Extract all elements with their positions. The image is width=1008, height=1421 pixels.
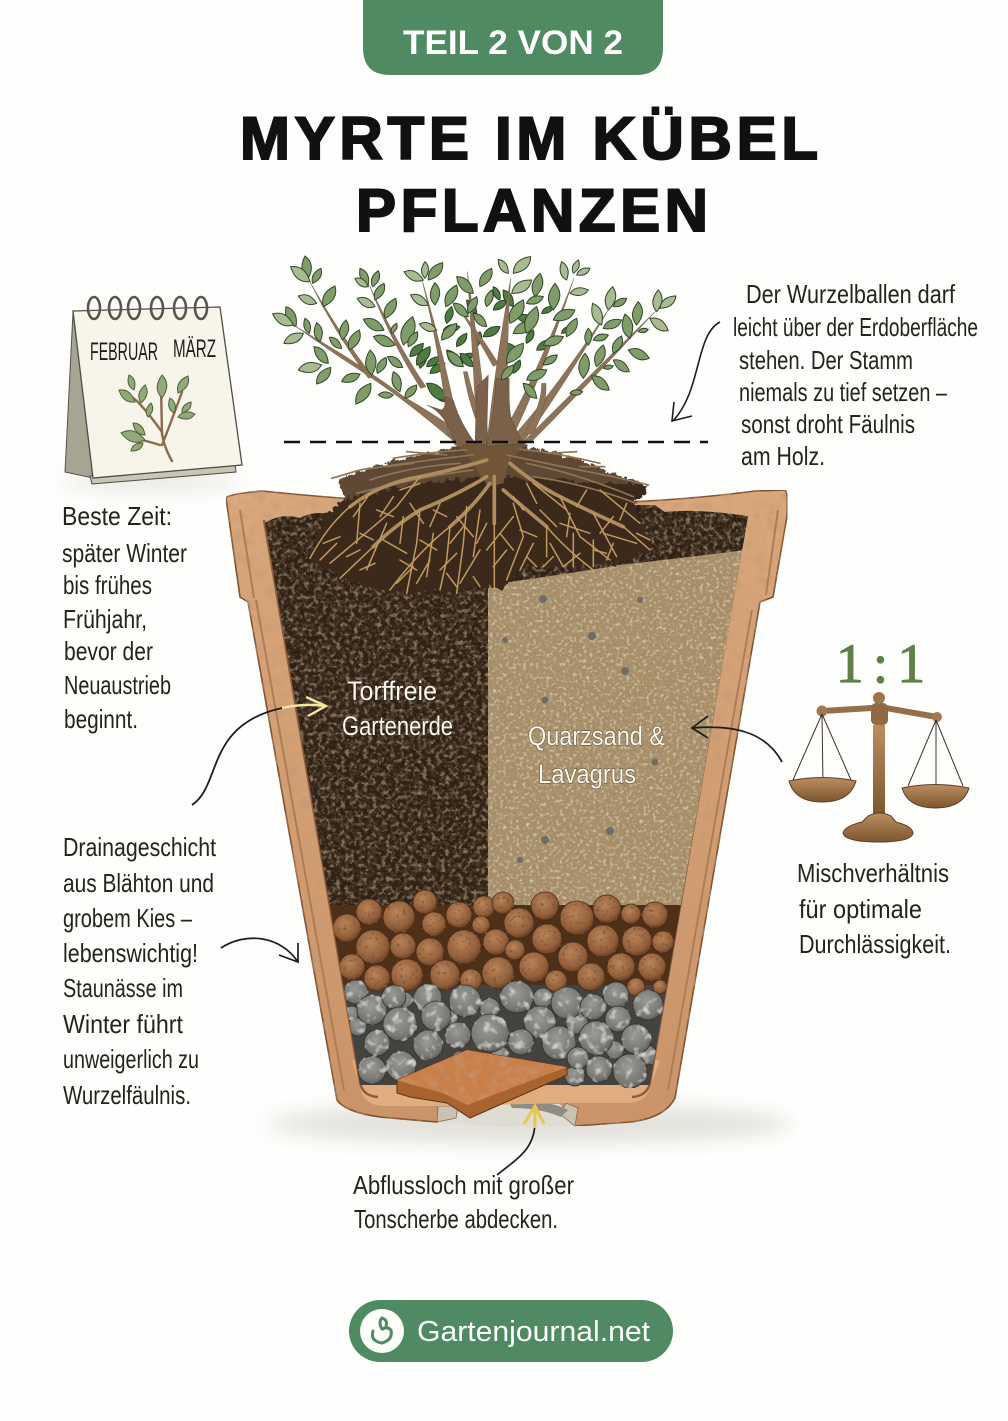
- calendar months: FEBRUAR: [90, 338, 158, 366]
- note: mix ratio: [797, 858, 951, 959]
- calendar base: [90, 464, 236, 484]
- branches: [292, 272, 658, 447]
- note: drainage layer: grobem Kies –: [63, 903, 192, 933]
- note: best time: bis frühes: [63, 570, 152, 600]
- gravel layer: [344, 980, 663, 1088]
- mid green leaves: [282, 255, 651, 407]
- note: best time: [62, 501, 187, 734]
- base behind clay: [326, 880, 685, 1000]
- note: best time: später Winter: [62, 538, 187, 568]
- label: sand and lava grit: [528, 721, 665, 789]
- calendar page: [73, 307, 242, 478]
- dark inner foliage: [407, 285, 571, 404]
- label: peat-free soil: [342, 676, 453, 741]
- note: drainage layer: lebenswichtig!: [63, 938, 198, 968]
- title: MYRTE IM KÜBEL: [240, 105, 818, 172]
- note: drainage layer: unweigerlich zu: [63, 1044, 199, 1074]
- label: peat-free soil: Gartenerde: [342, 711, 453, 741]
- root crown: [454, 443, 527, 487]
- soil: peat-free garden soil: [262, 498, 488, 905]
- note: best time: Neuaustrieb: [64, 670, 171, 700]
- note: drainage layer: Staunässe im: [63, 973, 183, 1003]
- footer badge: [349, 1300, 673, 1362]
- terracotta shard covering the drain hole: [397, 1050, 567, 1118]
- footer badge: Gartenjournal.net: [417, 1316, 650, 1348]
- note: mix ratio: Durchlässigkeit.: [799, 929, 951, 959]
- dark soil top band on sand side: [488, 505, 748, 585]
- pot interior floor: [352, 1060, 660, 1106]
- golden fine roots: [310, 477, 650, 593]
- icon: logo sprout: [360, 1309, 404, 1353]
- note: root ball above soil: niemals zu tief setzen –: [739, 377, 947, 407]
- broken edge of the pot floor: [437, 1103, 578, 1126]
- golden main roots: [350, 460, 623, 547]
- label: sand and lava grit: Lavagrus: [538, 759, 636, 789]
- note: root ball above soil: [733, 279, 978, 471]
- grey arch of the drain hole: [510, 1102, 568, 1117]
- note: root ball above soil: sonst droht Fäulnis: [741, 409, 915, 439]
- woody upper root zone: [337, 447, 643, 498]
- expanded clay layer: [333, 890, 674, 996]
- calendar back leaf: [65, 312, 93, 478]
- fine brown surface roots: [332, 449, 648, 503]
- arrow: to soil line: [672, 322, 720, 421]
- dark root ball mass: [308, 447, 653, 592]
- terracotta pot cross-section: [226, 490, 787, 1127]
- calendar rings: [88, 297, 207, 319]
- pale green leaves: [270, 253, 679, 375]
- base behind gravel: [343, 985, 667, 1085]
- note: drainage layer: Winter führt: [63, 1009, 184, 1039]
- label: peat-free soil: Torffreie: [347, 676, 437, 706]
- note: mix ratio: Mischverhältnis: [797, 858, 949, 888]
- note: root ball above soil: Der Wurzelballen darf: [746, 279, 956, 309]
- note: drainage layer: Wurzelfäulnis.: [63, 1080, 191, 1110]
- note: root ball above soil: am Holz.: [741, 441, 825, 471]
- note: drainage layer: aus Blähton und: [63, 868, 214, 898]
- ground shadow: [268, 1104, 792, 1144]
- ground seen through drainage hole: [437, 1104, 576, 1127]
- title: PFLANZEN: [356, 177, 708, 244]
- note: best time: Frühjahr,: [63, 604, 147, 634]
- calendar shadow: [60, 474, 240, 490]
- arrow: to garden soil: [192, 697, 326, 805]
- note: drain hole: [353, 1170, 574, 1234]
- ratio 1:1: 1 : 1: [836, 633, 925, 694]
- lower trunk stems: [427, 375, 523, 447]
- note: root ball above soil: stehen. Der Stamm: [739, 345, 913, 375]
- note: drainage layer: Drainageschicht: [63, 832, 217, 862]
- icon: balance scale: [789, 633, 969, 842]
- badge: part 2 of 2: TEIL 2 VON 2: [403, 24, 623, 62]
- grit stones in the sand: [502, 595, 658, 863]
- arrow: to drain hole: [497, 1106, 544, 1175]
- note: drainage layer: [63, 832, 217, 1110]
- label: sand and lava grit: Quarzsand &: [528, 721, 665, 751]
- myrtle plant: [270, 253, 679, 593]
- note: best time: beginnt.: [64, 704, 138, 734]
- pot body: [226, 490, 787, 1126]
- note: best time: bevor der: [64, 636, 153, 666]
- soil surface line: dashed: [284, 441, 708, 443]
- arrow: to sand: [692, 716, 782, 762]
- arrow: to drainage: [221, 938, 298, 962]
- title: [240, 105, 818, 244]
- note: drain hole: Tonscherbe abdecken.: [354, 1204, 558, 1234]
- calendar sprig: [116, 374, 196, 461]
- pot contents: [260, 495, 760, 1088]
- icon: calendar: [60, 297, 242, 490]
- note: best time: Beste Zeit:: [62, 501, 172, 531]
- sand and lava grit: [488, 545, 760, 905]
- note: mix ratio: für optimale: [799, 894, 922, 924]
- badge: part 2 of 2: [363, 0, 663, 75]
- inner rim shadow lines: [264, 520, 746, 1097]
- note: drain hole: Abflussloch mit großer: [353, 1170, 574, 1200]
- calendar months: MÄRZ: [173, 335, 216, 363]
